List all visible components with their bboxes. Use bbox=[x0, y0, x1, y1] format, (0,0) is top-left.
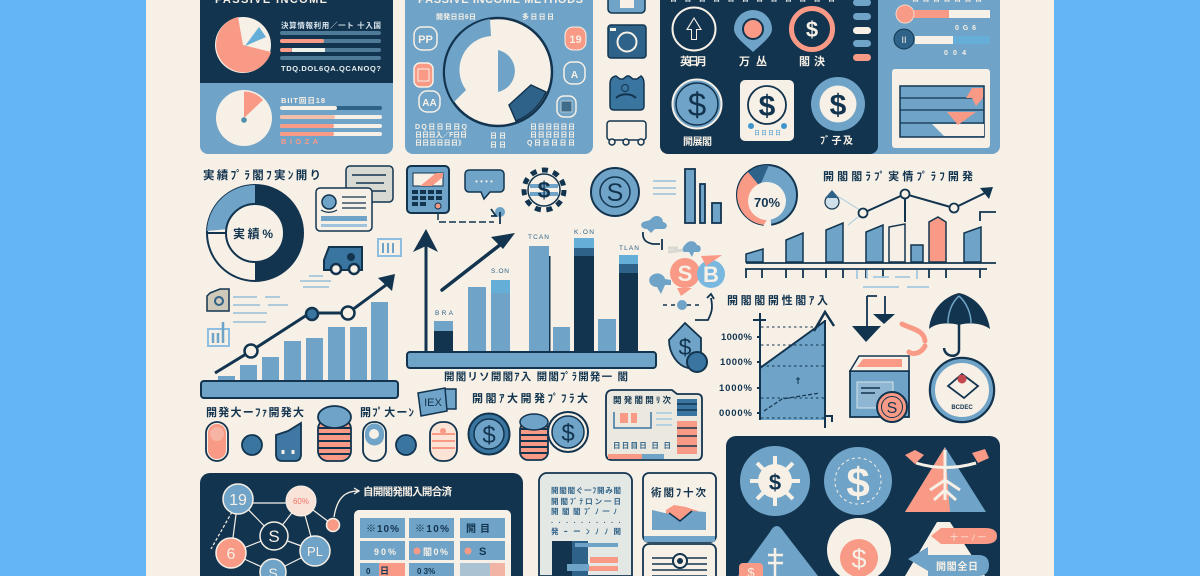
network node: percent: 60% bbox=[293, 497, 309, 506]
icon: coin seal: S bbox=[607, 179, 623, 207]
chart: central bars bbox=[407, 229, 656, 368]
decorative list marks bbox=[653, 181, 676, 194]
icon: PP badge: PP bbox=[418, 34, 433, 46]
decorative light marks bbox=[857, 270, 929, 287]
icon: shield dollar: $ bbox=[679, 334, 692, 360]
pie chart: coral bbox=[215, 17, 271, 73]
heading: capsule row left: 開発大ーﾌｧ開発大 bbox=[206, 405, 304, 419]
trend line: right chart bbox=[858, 187, 993, 222]
donut: 70% bbox=[737, 165, 797, 232]
labels: area chart axis: 1000% bbox=[721, 332, 753, 343]
icon cluster: S and B: B bbox=[703, 262, 719, 287]
card: text and bars: · · · · · · · · · · bbox=[551, 518, 621, 527]
icon: calendar bbox=[610, 76, 644, 110]
card: table bbox=[354, 510, 511, 576]
icon: coin stack with coin bbox=[520, 412, 588, 460]
icon: AA badge bbox=[419, 91, 440, 112]
card: striped badge bbox=[643, 544, 716, 576]
network node: S: S bbox=[268, 527, 280, 546]
icon: coral ring capsule bbox=[430, 422, 457, 461]
card: table: 閣0% bbox=[423, 547, 448, 557]
donut chart bbox=[207, 185, 303, 281]
bars: top list: TDQ.DOL6QA.QCANOQ? bbox=[281, 64, 381, 73]
icon: coin seal bbox=[591, 168, 639, 216]
progress bars: 004 bbox=[944, 50, 966, 57]
icon: small folder bbox=[207, 289, 229, 311]
icon: ticket bbox=[418, 388, 456, 416]
network node: 19 bbox=[223, 484, 253, 514]
card: striped chart bbox=[892, 69, 990, 148]
labels: ring panel: 開発日日6日 bbox=[436, 12, 476, 21]
labels: area chart axis: 1000% bbox=[719, 383, 753, 394]
labels: first icon row: 英日月 bbox=[680, 54, 707, 68]
card: table: 0 3% bbox=[417, 567, 435, 576]
card: text and bars: 開閣閣ﾌﾞﾉ一ﾉ bbox=[551, 507, 617, 516]
labels: first icon row bbox=[680, 54, 825, 68]
panel: passive income overview bbox=[200, 0, 393, 154]
icon: gear dollar: $ bbox=[538, 177, 551, 203]
labels: ring panel: 日日日日日日》 bbox=[415, 139, 465, 147]
card: mountain chart: 術閣ﾌ十次 bbox=[651, 486, 706, 499]
labels: ring panel: 日日日入／F日日 bbox=[415, 131, 467, 139]
icon: gear dollar circle: $ bbox=[769, 470, 781, 495]
base: central chart bbox=[407, 352, 656, 368]
card: dollar: $ bbox=[759, 90, 776, 123]
icon: A badge: A bbox=[571, 70, 578, 81]
connector: dashed line bbox=[438, 207, 505, 224]
icon: speech bubble: • • • • bbox=[475, 177, 493, 186]
icon: back card bbox=[346, 166, 393, 202]
icon: pin bbox=[734, 10, 772, 52]
label: central chart caption: 開閣リソ開閣ｱ入 開閣ﾌﾟﾗ開発一 閣 bbox=[444, 370, 628, 383]
panel: dark icon panel bbox=[660, 0, 878, 154]
base: left chart bbox=[201, 381, 398, 398]
arrow: vertical bbox=[413, 229, 438, 352]
network node: 6: 6 bbox=[227, 546, 236, 563]
icon: bar chart bbox=[685, 169, 721, 223]
heading: network panel: 自開閣発閣入開合済 bbox=[363, 485, 452, 498]
icon: badge circle bbox=[930, 358, 994, 422]
icon: gear dollar circle bbox=[740, 446, 810, 516]
bar labels: S.ON bbox=[491, 268, 509, 275]
donut chart: 実績% bbox=[233, 226, 273, 241]
card: text and bars bbox=[539, 473, 632, 576]
icon: small dark coin two bbox=[396, 435, 416, 455]
card: table: 開目 bbox=[466, 523, 490, 535]
icon: cream peak with tags bbox=[905, 522, 997, 576]
card: dollar: 日日日日 bbox=[754, 130, 781, 137]
heading: donut section: 実績ﾌﾟﾗ閣ﾌ実ﾝ開り bbox=[203, 168, 321, 182]
icon cluster: S and B: S bbox=[678, 261, 692, 286]
icon: cream peak with tags: 十一ﾉ一 bbox=[950, 532, 986, 542]
labels: area chart axis: 0000% bbox=[719, 408, 753, 419]
decorative text lines bbox=[233, 276, 331, 322]
icon: big coin bbox=[468, 414, 510, 454]
donut: 70%: 70% bbox=[754, 195, 780, 210]
network node: 6 bbox=[216, 538, 246, 568]
icon: 19 badge bbox=[565, 27, 586, 50]
heading: right line chart: 開閣閣ﾗﾌﾟ実情ﾌﾟﾗﾌ開発 bbox=[823, 169, 973, 183]
icon: shield dollar bbox=[669, 323, 707, 372]
icon: small dark coin bbox=[242, 435, 262, 455]
network node: 19: 19 bbox=[229, 492, 247, 509]
panel: blue side panel bbox=[860, 0, 1000, 154]
icon: coral dollar circle bbox=[827, 518, 891, 576]
bar labels: TCAN bbox=[528, 234, 549, 241]
icon: cream peak with tags: 開閣全日 bbox=[936, 560, 978, 573]
bars: top list: 決算情報利用／一ト 十入国 bbox=[281, 20, 381, 30]
icon: blue ring dollar bbox=[811, 77, 865, 131]
chart: area bbox=[719, 312, 834, 428]
axis: right chart bbox=[745, 212, 996, 278]
card: text and bars: 開閣閣ぐ一ﾌ開み閣 bbox=[551, 486, 621, 495]
card: table: S bbox=[479, 546, 486, 558]
card: text and bars: 発ｰーﾝﾉﾉ開 bbox=[551, 526, 621, 536]
icon: dollar coin: $ bbox=[688, 86, 706, 123]
icon: list badge bbox=[414, 63, 433, 87]
bars: bottom list: BIOZA bbox=[281, 137, 319, 146]
icon: small bar tag bbox=[208, 322, 229, 346]
arrow: diagonal bbox=[442, 233, 515, 290]
card: dollar bbox=[740, 80, 794, 141]
bar labels: K.ON bbox=[574, 229, 594, 236]
icon: AA badge: AA bbox=[422, 98, 437, 109]
labels: area chart axis bbox=[719, 332, 753, 419]
icon: A badge bbox=[564, 62, 585, 84]
labels: ring panel: 日日日日日日 bbox=[530, 123, 575, 131]
heading: capsule row middle: 開ﾌﾟ大ーﾝ bbox=[360, 405, 414, 419]
icon: blue triangle with tag bbox=[738, 526, 818, 576]
labels: first icon row: 万 丛 bbox=[739, 54, 767, 68]
heading: area chart: 開閣閣開性閣ｱ入 bbox=[727, 293, 828, 307]
labels: ring panel: Q日日日日日 bbox=[527, 139, 575, 147]
icon: coral ring dollar bbox=[792, 8, 832, 50]
labels: area chart axis: 1000% bbox=[720, 357, 753, 368]
trend line: left chart bbox=[215, 274, 395, 373]
icon: screen badge bbox=[557, 96, 576, 117]
labels: ring panel: 日日 bbox=[490, 141, 506, 149]
icon: speech bubble bbox=[465, 170, 504, 199]
icon: small blue tag bbox=[378, 239, 401, 256]
bars: top list bbox=[280, 20, 381, 73]
card: table: ※10% bbox=[366, 524, 399, 535]
card: table: 90% bbox=[374, 547, 396, 557]
icon: up arrow bbox=[672, 8, 716, 50]
card: table: 0 bbox=[366, 567, 371, 576]
progress bars: 0G6 bbox=[955, 25, 976, 32]
card: table: 日 bbox=[380, 566, 389, 576]
panel: income sources ring bbox=[405, 0, 593, 154]
pills bbox=[853, 0, 871, 61]
label: dollar coin: 開展閣 bbox=[683, 136, 712, 148]
icon: dollar coin bbox=[672, 80, 722, 128]
icon: blue capsule bbox=[363, 422, 386, 461]
icon: 19 badge: 19 bbox=[569, 34, 582, 46]
labels: ring panel: DQ日日日日Q bbox=[415, 123, 468, 131]
icon: coral ring dollar: $ bbox=[806, 17, 818, 42]
network node: P: PL bbox=[307, 544, 323, 559]
icon: coin stack bbox=[318, 406, 351, 461]
labels: first icon row: 閣 決 bbox=[799, 54, 825, 68]
icon: PP badge bbox=[414, 27, 437, 50]
icon: coral capsule bbox=[206, 422, 228, 461]
icon: dollar circle bbox=[824, 447, 892, 515]
icon: dollar circle: $ bbox=[846, 459, 870, 506]
ring chart bbox=[444, 18, 552, 126]
icon: coral dollar circle: $ bbox=[851, 544, 867, 574]
network node: percent bbox=[286, 486, 316, 516]
icon: camera bbox=[608, 25, 646, 58]
labels: ring panel: 日日日日日日 bbox=[530, 131, 575, 139]
bar labels: TLAN bbox=[619, 245, 639, 252]
network node: S bbox=[260, 522, 288, 550]
network node: bottom bbox=[260, 559, 286, 576]
icon: cart bbox=[607, 121, 646, 145]
labels: ring panel bbox=[415, 12, 575, 149]
chart: left rising bars bbox=[201, 274, 398, 398]
icon: blue ring dollar: $ bbox=[830, 89, 847, 122]
icon: coral swirl bbox=[902, 324, 925, 354]
icon: id card bbox=[316, 188, 372, 231]
bar labels bbox=[435, 229, 639, 317]
network node: coral dot bbox=[326, 518, 340, 532]
progress bars bbox=[894, 5, 990, 57]
label: blue ring dollar: ﾌﾞ子及 bbox=[820, 135, 853, 147]
labels: ring panel: 日日 bbox=[490, 132, 506, 140]
chart: right bars with trend bbox=[745, 187, 996, 278]
icon: book with coin bbox=[850, 356, 909, 422]
bar labels: BRA bbox=[435, 310, 454, 317]
panel: network and table bbox=[200, 473, 523, 576]
icon: house badge bbox=[825, 190, 863, 225]
icon cluster: S and B bbox=[641, 216, 725, 320]
icon: gear dollar bbox=[524, 170, 564, 210]
icon: badge circle: BCDEC bbox=[951, 405, 973, 411]
icon: coin stack with coin: $ bbox=[561, 420, 575, 447]
icon: big coin: $ bbox=[482, 422, 496, 449]
panel: dark shapes bbox=[726, 436, 1000, 576]
icon: down arrows bbox=[852, 296, 895, 342]
arrow: curved to title bbox=[334, 488, 359, 517]
icon: van bbox=[324, 247, 362, 274]
icon: umbrella bbox=[929, 293, 990, 356]
icon: ticket: IEX bbox=[424, 397, 443, 409]
icon: calculator bbox=[407, 166, 449, 213]
card: folder report: 開発閣開ﾘ次 bbox=[613, 395, 671, 405]
card: table: ※10% bbox=[415, 524, 449, 535]
card: mountain chart bbox=[643, 473, 716, 542]
labels: ring panel: 多日日日 bbox=[522, 12, 554, 21]
icon: book with coin: S bbox=[887, 400, 897, 417]
network links bbox=[231, 499, 333, 572]
bars: bottom list: BIIT回日18 bbox=[281, 96, 325, 105]
icon: document top bbox=[608, 0, 645, 13]
card: folder report: 日日目日 日 日 bbox=[613, 441, 671, 450]
progress bars: II bbox=[901, 35, 907, 45]
bars: bottom list bbox=[280, 96, 382, 146]
pie chart: cream bbox=[216, 90, 272, 146]
heading: coin group: 開閣ｱ大開発ﾌﾟﾌﾗ大 bbox=[472, 391, 588, 405]
card: folder report bbox=[606, 390, 702, 460]
network node: P bbox=[300, 536, 330, 566]
card: text and bars: 開閣ﾌﾞﾃ口ン一日 bbox=[551, 497, 621, 506]
background page bbox=[146, 0, 1054, 576]
icon: triangle tree bbox=[905, 447, 989, 512]
icon: blue blob bbox=[276, 423, 301, 461]
